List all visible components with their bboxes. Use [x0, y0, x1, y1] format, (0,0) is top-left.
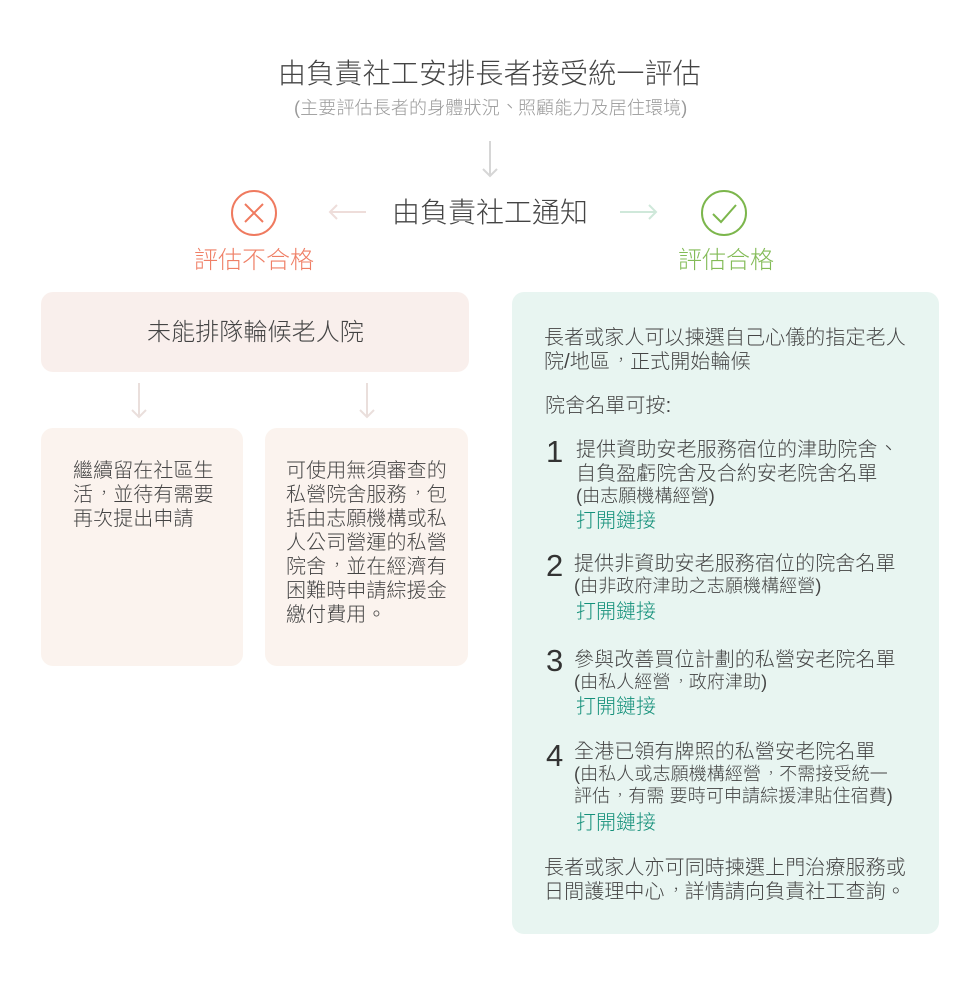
- text: other services: [544, 857, 906, 903]
- item 4 text: (由私人或志願機構經營 不需接受統一: [574, 764, 888, 784]
- item 4 text: 評估 有需 要時可申請綜援津貼住宿費): [574, 786, 893, 806]
- item 1 link: 打開鏈接: [576, 510, 656, 532]
- text: choose care home: 院/地區 正式開始輪候: [544, 351, 751, 373]
- text: stay in community: 繼續留在社區生: [73, 460, 214, 482]
- text: other services: 長者或家人亦可同時揀選上門治療服務或: [544, 857, 906, 879]
- text: stay in community: 活 並待有需要: [73, 484, 214, 506]
- item 1 text: 、: [878, 438, 899, 460]
- item 4 text: ，: [614, 788, 626, 802]
- arrow: down to left option: [132, 383, 146, 418]
- item 2 text: (由非政府津助之志願機構經營): [574, 576, 822, 596]
- item 2 text: [574, 553, 896, 596]
- item 4 text: 全港已領有牌照的私營安老院名單: [574, 741, 876, 763]
- item 4 text: [574, 741, 893, 806]
- item 1 text: 提供資助安老服務宿位的津助院舍: [576, 439, 878, 461]
- number 1: 1: [546, 434, 563, 469]
- item 2 text: 提供非資助安老服務宿位的院舍名單: [574, 553, 896, 575]
- item 3 text: ，: [674, 674, 687, 688]
- item 1 text: 自負盈虧院舍及合約安老院舍名單: [576, 463, 878, 485]
- text: private care homes: [286, 460, 447, 626]
- number 3: 3: [546, 643, 563, 678]
- icon: cross in circle: [231, 190, 277, 236]
- text: private care homes: 括由志願機構或私: [286, 508, 447, 530]
- arrow: down to notification: [482, 141, 498, 178]
- text: other services: ，: [669, 883, 683, 899]
- heading: social worker notifies: 由負責社工通知: [392, 197, 588, 228]
- list item 3: [546, 643, 896, 718]
- text: private care homes: 可使用無須審查的: [286, 460, 447, 482]
- text: private care homes: 繳付費用。: [286, 604, 386, 626]
- item 3 link: 打開鏈接: [576, 696, 656, 718]
- panel: private care homes: [265, 428, 468, 666]
- text: private care homes: 困難時申請綜援金: [286, 580, 447, 602]
- text: private care homes: 院舍 並在經濟有: [286, 556, 447, 578]
- subtitle: 、: [501, 97, 519, 117]
- item 2 link: 打開鏈接: [576, 601, 656, 623]
- icon: check in circle: [701, 190, 747, 236]
- item 4 text: ，: [765, 766, 777, 780]
- list item 2: [546, 548, 896, 623]
- text: private care homes: 人公司營運的私營: [286, 532, 447, 554]
- item 3 text: (由私人經營 政府津助): [574, 672, 767, 692]
- text: private care homes: ，: [411, 486, 425, 502]
- text: private care homes: 私營院舍服務 包: [286, 484, 447, 506]
- number 4: 4: [546, 738, 563, 773]
- text: choose care home: [544, 327, 906, 373]
- arrow: down to right option: [360, 383, 374, 418]
- arrow: to failed result: [328, 204, 366, 220]
- title: 由負責社工安排長者接受統一評估: [278, 58, 701, 89]
- text: list intro: 院舍名單可按:: [545, 395, 671, 417]
- text: stay in community: [73, 460, 214, 530]
- item 1 text: [576, 438, 899, 506]
- number 2: 2: [546, 548, 563, 583]
- panel: stay in community: [41, 428, 243, 666]
- subtitle: (主要評估長者的身體狀況 照顧能力及居住環境): [294, 98, 687, 118]
- label: assessment failed: 評估不合格: [194, 247, 314, 274]
- text: stay in community: 再次提出申請: [73, 508, 194, 530]
- list item 4: [546, 738, 893, 834]
- item 4 link: 打開鏈接: [576, 812, 656, 834]
- panel: cannot queue for care home: [41, 292, 469, 372]
- text: stay in community: ，: [97, 486, 111, 502]
- list item 1: [546, 434, 899, 532]
- panel heading: 未能排隊輪候老人院: [147, 319, 364, 346]
- item 3 text: 參與改善買位計劃的私營安老院名單: [574, 649, 896, 671]
- text: choose care home: 長者或家人可以揀選自己心儀的指定老人: [544, 327, 906, 349]
- text: other services: 日間護理中心 詳情請向負責社工查詢。: [544, 881, 906, 903]
- text: private care homes: ，: [330, 558, 344, 574]
- panel: passed assessment details: [512, 292, 939, 934]
- item 1 text: (由志願機構經營): [576, 486, 715, 506]
- label: assessment passed: 評估合格: [678, 247, 774, 274]
- arrow: to passed result: [620, 204, 658, 220]
- item 3 text: [574, 649, 896, 692]
- text: choose care home: ，: [614, 353, 628, 369]
